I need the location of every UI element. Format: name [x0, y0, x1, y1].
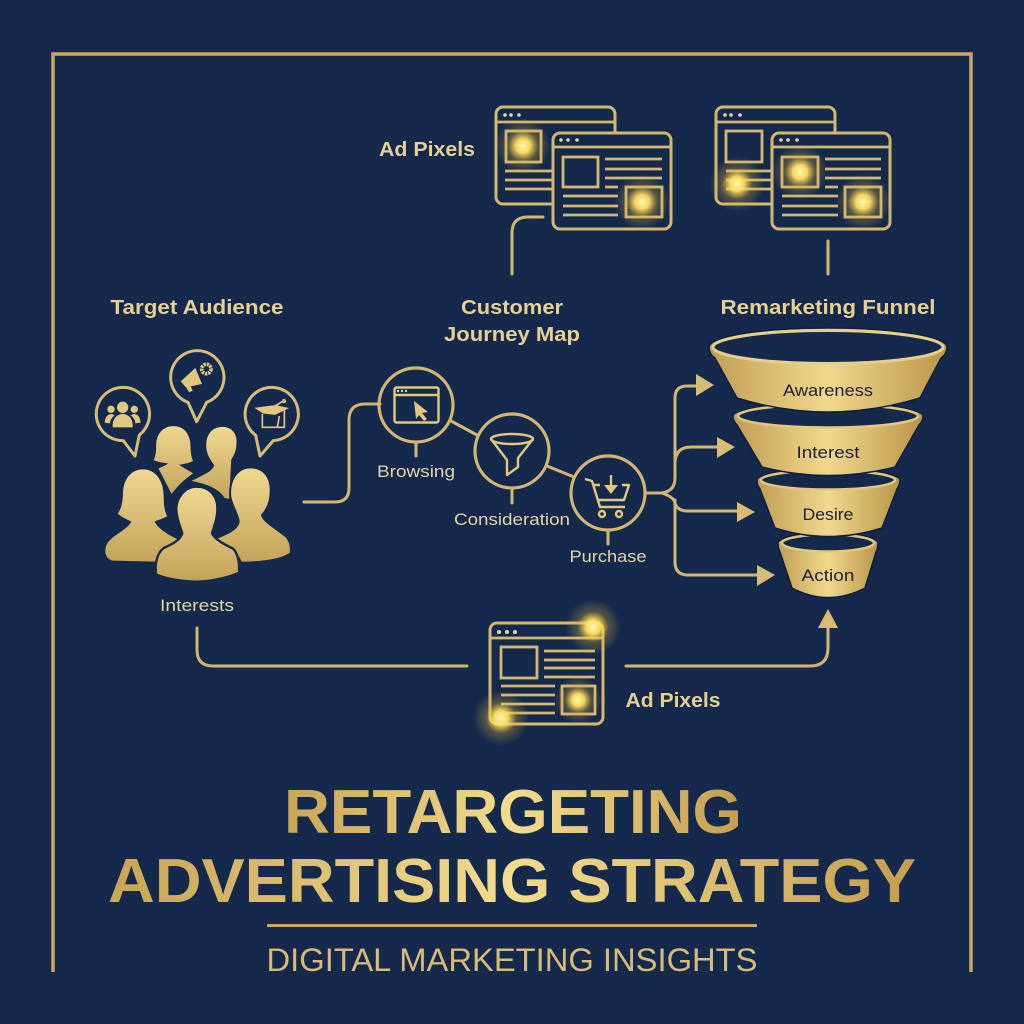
label: purchase: Purchase — [570, 547, 646, 566]
label: browsing: Browsing — [377, 462, 455, 481]
funnel tier: desire: Desire — [802, 505, 854, 524]
heading: customer journey map: Journey Map — [444, 324, 580, 346]
subtitle: DIGITAL MARKETING INSIGHTS — [266, 942, 758, 978]
step: consideration — [475, 414, 549, 488]
heading: target audience: Target Audience — [110, 297, 284, 319]
connector from ad pixels — [512, 217, 543, 274]
bubble: group icon — [96, 387, 150, 456]
person front center — [156, 487, 239, 582]
funnel tier: awareness — [709, 328, 947, 412]
bubble: megaphone icon — [171, 351, 224, 422]
heading: customer journey map: Customer — [461, 297, 563, 319]
label: ad pixels top: Ad Pixels — [379, 139, 475, 161]
funnel tier: interest: Interest — [796, 443, 860, 462]
journey connectors — [416, 421, 608, 544]
step: purchase — [571, 456, 645, 530]
browser window back — [495, 107, 615, 204]
browser window front — [553, 133, 671, 230]
title — [108, 778, 916, 916]
browser window front — [772, 133, 891, 230]
funnel tier: action — [778, 533, 878, 598]
browser window back — [709, 107, 835, 212]
connector: ad pixels to funnel with arrow — [626, 609, 838, 666]
panel: journey map — [377, 368, 646, 566]
panel: bottom ad pixel window — [473, 599, 621, 746]
funnel tier: desire — [757, 469, 900, 536]
connector: audience to journey — [304, 404, 380, 502]
person back right — [189, 426, 237, 500]
arrows: journey branches to funnel — [646, 374, 775, 586]
person front left — [104, 468, 180, 563]
label: consideration: Consideration — [454, 510, 570, 529]
person front right — [213, 467, 291, 563]
panel: ad pixel windows left — [495, 107, 671, 274]
label: interests: Interests — [160, 596, 234, 615]
title rule — [267, 924, 757, 927]
funnel tier: awareness: Awareness — [783, 381, 873, 400]
panel: ad pixel windows right — [709, 107, 891, 274]
connector to funnel — [826, 241, 830, 274]
panel: target audience group — [96, 351, 298, 582]
panel: remarketing funnel — [709, 328, 947, 598]
bubble: analytics icon — [245, 387, 298, 456]
heading: remarketing funnel: Remarketing Funnel — [720, 297, 936, 319]
funnel tier: action: Action — [802, 566, 854, 585]
label: ad pixels bottom: Ad Pixels — [626, 690, 720, 712]
connector: interests to ad pixels — [197, 628, 467, 666]
step: browsing — [379, 368, 453, 442]
title: RETARGETING — [284, 778, 742, 847]
funnel tier: interest — [733, 403, 923, 476]
title: ADVERTISING STRATEGY — [108, 847, 916, 916]
heading: customer journey map — [444, 297, 580, 346]
person back left — [153, 425, 195, 496]
